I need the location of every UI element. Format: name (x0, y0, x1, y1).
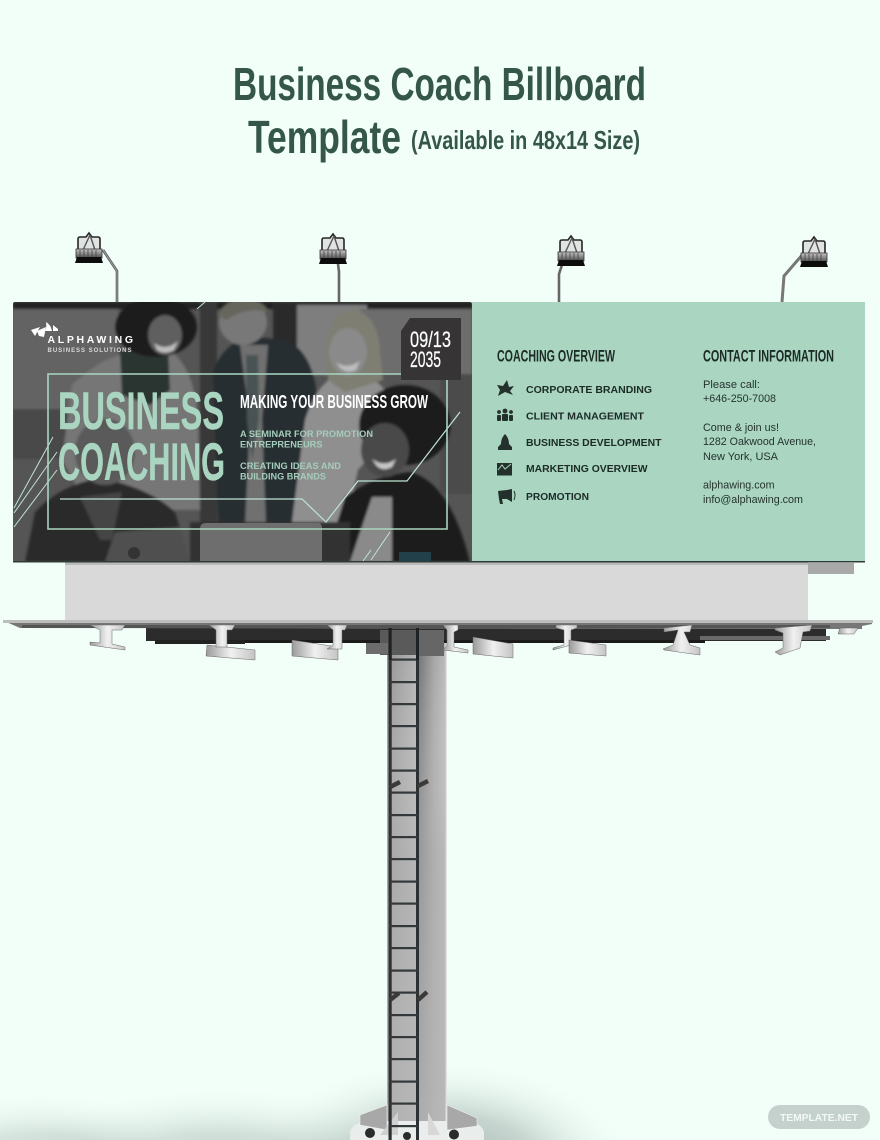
photo: blue mug (399, 552, 431, 562)
photo: background window tones (13, 302, 472, 522)
client management: CLIENT MANAGEMENT (526, 410, 645, 422)
photo: man in suit (213, 299, 317, 525)
subheading: MAKING YOUR BUSINESS GROW (240, 392, 428, 412)
logo (31, 322, 133, 354)
content frame (48, 374, 447, 529)
icon: people (497, 409, 513, 421)
billboard photo (13, 297, 472, 562)
headline (58, 382, 225, 492)
headline: COACHING (58, 433, 225, 492)
pole (387, 628, 447, 1140)
seminar text: ENTREPRENEURS (240, 440, 322, 450)
billboard back panel (65, 562, 854, 622)
platform (3, 620, 873, 656)
title: (Available in 48x14 Size) (411, 125, 640, 155)
corporate branding: CORPORATE BRANDING (526, 384, 652, 396)
contact details: New York, USA (703, 451, 779, 463)
business development: BUSINESS DEVELOPMENT (526, 437, 662, 449)
icon: chart envelope (497, 463, 512, 476)
photo: woman with curly hair (62, 297, 200, 510)
seminar text: A SEMINAR FOR PROMOTION (240, 429, 373, 440)
lamp 4 (782, 237, 828, 302)
watermark badge (768, 1105, 870, 1129)
title (233, 58, 646, 163)
icon: megaphone (498, 489, 515, 504)
coaching overview heading: COACHING OVERVIEW (497, 346, 616, 366)
support beams (90, 625, 858, 660)
lamp 1 (75, 233, 117, 302)
ladder (388, 628, 428, 1140)
ground shadow (0, 1058, 640, 1140)
logo: ALPHAWING (48, 334, 133, 346)
contact details (703, 379, 816, 506)
headline: BUSINESS (58, 382, 224, 441)
contact details: alphawing.com (703, 480, 774, 492)
photo: man in front left (25, 419, 190, 562)
logo: BUSINESS SOLUTIONS (48, 348, 132, 354)
marketing overview: MARKETING OVERVIEW (526, 463, 648, 475)
date badge: 2035 (410, 347, 441, 372)
contact details: 1282 Oakwood Avenue, (703, 436, 816, 448)
photo: laptop (200, 523, 322, 562)
icon: star (497, 380, 514, 396)
contact details: info@alphawing.com (703, 494, 803, 506)
date badge (401, 318, 461, 380)
icon: rocket (498, 434, 512, 450)
lamps (75, 233, 828, 302)
photo: woman in front (325, 385, 470, 562)
decorative chart lines (14, 302, 460, 561)
date badge: 09/13 (410, 327, 451, 352)
seminar text: CREATING IDEAS AND (240, 461, 341, 472)
contact details: +646-250-7008 (703, 393, 776, 405)
title: Template (248, 111, 401, 163)
title: Business Coach Billboard (233, 58, 646, 110)
photo: blond woman (292, 310, 392, 532)
pole base (350, 1105, 484, 1140)
billboard bottom edge (13, 561, 865, 562)
coaching overview list (497, 380, 662, 504)
photo: foreground (190, 522, 350, 562)
lamp 3 (557, 236, 585, 302)
seminar text: BUILDING BRANDS (240, 472, 326, 482)
contact details: Come & join us! (703, 422, 779, 434)
pole ladder top over platform (388, 628, 419, 660)
promotion: PROMOTION (526, 491, 589, 503)
lamp 2 (319, 234, 347, 302)
seminar text (240, 429, 373, 482)
contact details: Please call: (703, 379, 760, 391)
logo icon (31, 322, 58, 337)
watermark badge: TEMPLATE.NET (780, 1112, 859, 1124)
photo: wristwatch (128, 547, 140, 559)
billboard right panel (472, 302, 865, 562)
